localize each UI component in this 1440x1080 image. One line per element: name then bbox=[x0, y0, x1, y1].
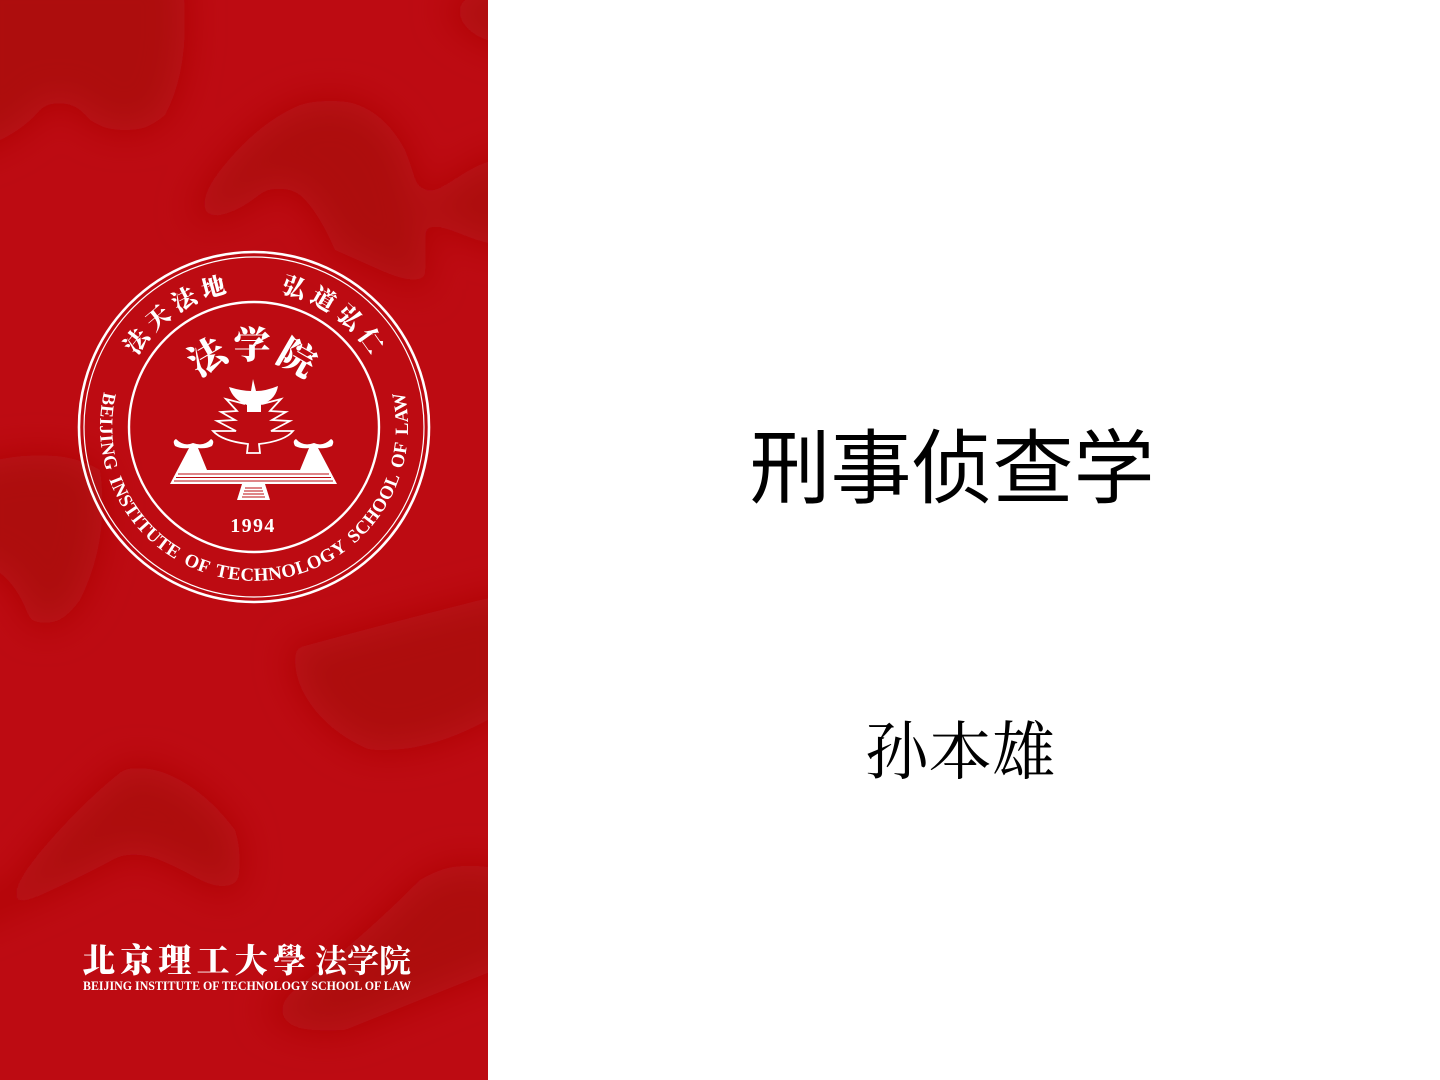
icon: bird bbox=[229, 379, 278, 412]
seal english name: BEIJING INSTITUTE OF TECHNOLOGY SCHOOL OF LAW bbox=[100, 392, 408, 581]
seal rings bbox=[79, 252, 429, 602]
icon: scales base bbox=[170, 439, 337, 500]
footer: university logotype bbox=[82, 942, 411, 993]
seal name: 院 bbox=[270, 331, 323, 386]
seal name: 法 bbox=[181, 328, 237, 385]
seal: law school emblem bbox=[78, 250, 430, 604]
panel: red sidebar bbox=[0, 0, 488, 1080]
seal year: 1994 bbox=[230, 515, 276, 537]
seal motto left: 法天法地 bbox=[122, 274, 227, 354]
author name: 孙本雄 bbox=[865, 717, 1056, 788]
footer english name: BEIJING INSTITUTE OF TECHNOLOGY SCHOOL OF LAW bbox=[83, 979, 411, 993]
title: 刑事侦查学 bbox=[750, 425, 1155, 515]
seal name bbox=[181, 325, 323, 386]
seal motto right: 弘道弘仁 bbox=[282, 274, 384, 355]
seal name: 学 bbox=[234, 325, 270, 367]
footer chinese school name: 法学院 bbox=[315, 943, 411, 979]
icon: pine tree bbox=[213, 399, 293, 453]
footer chinese university name: 北京理工大學 bbox=[82, 942, 306, 980]
